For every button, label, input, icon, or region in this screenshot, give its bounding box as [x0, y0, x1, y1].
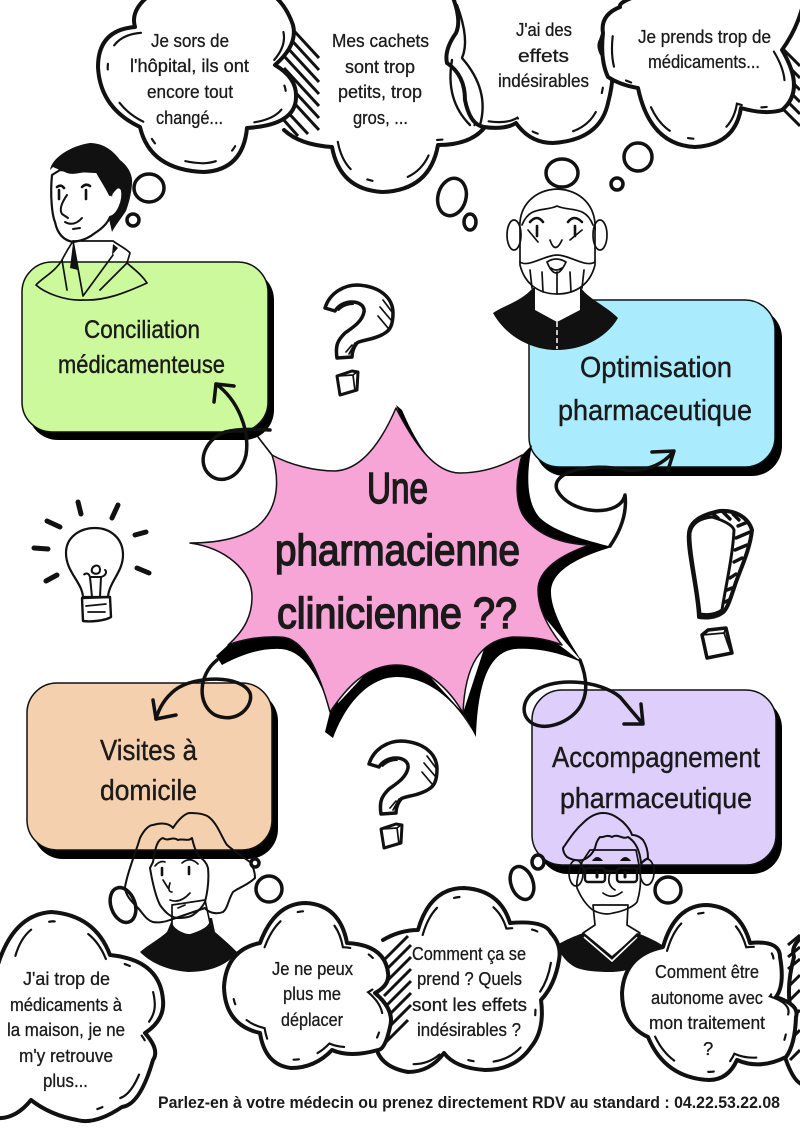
- thought cloud: trop de médicaments: Je prends trop de: [638, 26, 771, 47]
- thought cloud: comment ça se prend: prend ? Quels: [417, 968, 522, 989]
- thought cloud: trop de médicaments à la maison: [0, 912, 163, 1121]
- panel: visites: domicile: [100, 775, 197, 807]
- thought cloud: comment ça se prend: Comment ça se: [412, 943, 526, 964]
- thought cloud: comment ça se prend: sont les effets: [412, 994, 527, 1015]
- thought bubbles bottom: [106, 855, 681, 926]
- icon: light bulb: [34, 502, 149, 621]
- icon: question mark bottom: [369, 741, 437, 848]
- panel: optimisation: [529, 300, 782, 476]
- thought cloud: cachets: sont trop: [345, 56, 415, 77]
- panel: accompagnement: pharmaceutique: [560, 783, 752, 815]
- thought cloud: comment ça se prend: [378, 888, 560, 1072]
- panel: optimisation: pharmaceutique: [558, 395, 752, 427]
- hatching behind bottom clouds: [384, 935, 800, 1060]
- thought bubbles top: [127, 143, 652, 230]
- central burst title: Une: [367, 464, 428, 513]
- thought cloud: trop de médicaments: [602, 0, 800, 147]
- thought cloud: hôpital: encore tout: [147, 81, 233, 102]
- icon: question mark top: [325, 285, 393, 395]
- thought cloud: trop de médicaments à la maison: J'ai trop de: [23, 968, 110, 989]
- central burst title: [190, 405, 612, 738]
- thought cloud: hôpital: l'hôpital, ils ont: [130, 55, 249, 76]
- panel: accompagnement: [532, 690, 782, 874]
- panel: conciliation: médicamenteuse: [58, 351, 225, 379]
- arrow: to optimisation: [556, 451, 674, 546]
- person: man with glasses: [557, 813, 665, 972]
- thought cloud: trop de médicaments à la maison: m'y retrouve: [19, 1045, 113, 1066]
- panel: visites: Visites à: [100, 735, 198, 767]
- thought cloud: hôpital: Je sors de: [151, 30, 229, 51]
- panel: accompagnement: Accompagnement: [552, 742, 760, 774]
- hatching behind top clouds: [282, 20, 800, 136]
- thought cloud: déplacer: [224, 903, 391, 1068]
- arrow: to conciliation: [203, 384, 272, 479]
- thought cloud: effets: effets: [518, 45, 569, 66]
- thought cloud: déplacer: Je ne peux: [272, 958, 354, 979]
- icon: exclamation mark: [689, 511, 752, 658]
- panel: optimisation: Optimisation: [580, 352, 732, 384]
- thought cloud: hôpital: [98, 0, 296, 172]
- thought cloud: hôpital: changé...: [156, 107, 223, 128]
- thought cloud: effets: J'ai des: [516, 19, 572, 40]
- arrow: to visites: [153, 660, 251, 719]
- thought cloud: effets: indésirables: [498, 70, 589, 91]
- thought cloud: cachets: petits, trop: [338, 81, 422, 102]
- thought cloud: autonome: autonome avec: [651, 987, 763, 1008]
- person: woman with wavy hair: [125, 813, 255, 972]
- thought cloud: comment ça se prend: indésirables ?: [417, 1019, 521, 1040]
- central burst title: clinicienne ??: [277, 589, 517, 638]
- panel: conciliation: [22, 262, 274, 440]
- person: bald bearded man: [493, 189, 618, 350]
- thought cloud: cachets: [284, 0, 495, 192]
- thought cloud: déplacer: plus me: [283, 983, 341, 1004]
- far right cloud edge: [784, 935, 800, 1085]
- thought cloud: autonome: mon traitement: [649, 1012, 765, 1033]
- arrow: to accompagnement: [524, 660, 643, 726]
- thought cloud: trop de médicaments: médicaments...: [648, 51, 760, 72]
- thought cloud: cachets: Mes cachets: [332, 30, 429, 51]
- thought cloud: trop de médicaments à la maison: la maison, je ne: [7, 1019, 125, 1040]
- thought cloud: effets: [446, 0, 636, 143]
- thought cloud: déplacer: déplacer: [281, 1009, 343, 1030]
- thought cloud: autonome: [622, 905, 797, 1080]
- thought cloud: trop de médicaments à la maison: médicaments à: [10, 994, 123, 1015]
- panel: visites: [27, 683, 278, 859]
- central burst title: pharmacienne: [275, 526, 520, 575]
- thought cloud: trop de médicaments à la maison: plus...: [43, 1070, 88, 1091]
- thought cloud: autonome: Comment être: [655, 961, 759, 982]
- thought cloud: cachets: gros, ...: [353, 107, 408, 128]
- person: man with dark hair: [36, 143, 147, 300]
- panel: conciliation: Conciliation: [84, 316, 200, 344]
- thought cloud: autonome: ?: [703, 1038, 713, 1059]
